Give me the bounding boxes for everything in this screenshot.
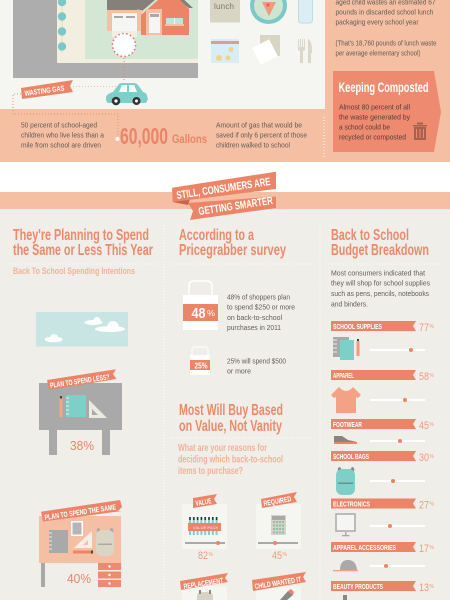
- slider: [258, 541, 298, 545]
- icon: shopping bag 48%: [183, 281, 218, 330]
- slider: [370, 348, 425, 352]
- panel: keeping composted: recycled or composted: [339, 132, 406, 142]
- text: gas saved: Amount of gas that would be: [216, 120, 302, 130]
- card: replacement: [180, 573, 228, 600]
- icon: shopping bag 25%: [190, 347, 210, 375]
- text: 48% of shoppers: to spend $250 or more: [227, 302, 295, 312]
- panel: keeping composted: the waste generated by: [339, 112, 410, 122]
- icon: shoe: [334, 436, 357, 444]
- text: budget intro: [331, 268, 430, 308]
- ribbon: wasting gas: WASTING GAS: [24, 84, 65, 98]
- section banner: still, consumers are getting smarter: GETTING SMARTER: [198, 195, 274, 218]
- budget row: footwear 45%: %: [430, 422, 434, 428]
- icon: trash can: [413, 122, 427, 140]
- text: children driven to school: mile from school are driven: [21, 140, 101, 150]
- panel: keeping composted: Almost 80 percent of all: [339, 102, 410, 112]
- heading: budget breakdown: Back to School: [331, 227, 409, 244]
- heading: pricegrabber survey: Pricegrabber survey: [179, 242, 286, 259]
- icon: calculator: [71, 521, 83, 536]
- section banner: still, consumers are getting smarter: [172, 172, 276, 220]
- ribbon: required: REQUIRED: [263, 494, 292, 508]
- budget row: apparel 58%: 58: [419, 371, 429, 383]
- budget row: electronics 27%: 27: [419, 500, 429, 512]
- icon: pizza plate: [250, 0, 287, 24]
- text: 25% will spend: 25% will spend $500: [227, 356, 286, 366]
- heading: pricegrabber survey: [179, 227, 286, 259]
- icon: row of trees: [58, 0, 66, 53]
- icon: backpack: [336, 467, 355, 495]
- statistic: 45%: %: [282, 552, 288, 558]
- text: 25% will spend: or more: [227, 366, 251, 376]
- icon: car: [106, 83, 148, 105]
- icon: house: [107, 0, 193, 35]
- budget row: apparel 58%: [331, 370, 434, 413]
- statistic: 40%: 40%: [67, 571, 91, 586]
- slider: [370, 479, 425, 483]
- statistic: 38%: 38%: [70, 438, 94, 453]
- slider: [370, 564, 425, 568]
- budget row: school supplies 77%: SCHOOL SUPPLIES: [333, 322, 382, 331]
- icon: set square: [74, 531, 92, 548]
- icon: napkins: [252, 35, 280, 65]
- budget row: electronics 27%: %: [430, 502, 434, 508]
- budget row: beauty products 13%: %: [430, 584, 434, 590]
- statistic: 82%: 82: [198, 550, 208, 562]
- icon: t-shirt: [331, 387, 361, 413]
- icon: shopping bag 25%: 25%: [194, 360, 208, 370]
- text: children driven to school: [21, 120, 104, 150]
- subheading: spending intentions: Back To School Spending Intentions: [13, 266, 135, 277]
- subheading: reasons question: items to purchase?: [178, 466, 243, 477]
- lunch waste items: [210, 0, 312, 65]
- icon: drawers: [98, 563, 121, 587]
- subheading: reasons question: deciding which back-to-school: [178, 454, 283, 466]
- text: budget intro: Most consumers indicated that: [331, 268, 425, 278]
- dotted route lines: [13, 58, 324, 157]
- icon: value pack: VALUE PACK: [193, 525, 219, 530]
- text: 48% of shoppers: 48% of shoppers plan: [227, 292, 290, 302]
- icon: lunch bag: lunch: [214, 2, 234, 11]
- budget row: beauty products 13%: [331, 581, 434, 600]
- subheading: reasons question: [178, 443, 283, 477]
- text: 48% of shoppers: purchases in 2011: [227, 323, 281, 332]
- billboard: plan to spend less: [39, 369, 122, 455]
- budget row: school supplies 77%: [331, 321, 434, 360]
- text: gas saved: children walked to school: [216, 140, 290, 150]
- slider: [185, 541, 225, 545]
- text: lunch packaging waste: [336, 0, 436, 58]
- text: lunch packaging waste: pounds in discarded school lunch: [336, 8, 434, 16]
- icon: bottle: [343, 595, 347, 600]
- panel: keeping composted: a school could be: [339, 122, 390, 132]
- text: 25% will spend: [227, 356, 286, 376]
- icon: shopping bag 48%: 48: [192, 305, 206, 322]
- text: children driven to school: 50 percent of school-aged: [21, 120, 97, 130]
- card: required 45%: [256, 492, 301, 562]
- icon: set square: [89, 400, 107, 418]
- budget row: school bags 30%: [331, 451, 434, 495]
- icon: fork and knife: [298, 39, 312, 63]
- ribbon: plan to spend the same: PLAN TO SPEND THE SAME: [44, 502, 117, 522]
- text: children driven to school: children who live less than a: [21, 130, 104, 140]
- heading: value not vanity: [179, 402, 283, 435]
- icon: pencil: [73, 550, 93, 554]
- heading: value not vanity: Most Will Buy Based: [179, 402, 283, 419]
- icon: calculator: [271, 515, 286, 535]
- icon: location marker circle: [112, 34, 136, 56]
- text: 48% of shoppers: [227, 292, 295, 332]
- icon: backpack: [197, 590, 213, 600]
- icon: shopping bag 48%: %: [207, 309, 215, 318]
- text: gas saved: [216, 120, 307, 150]
- heading: planning to spend: [13, 227, 153, 259]
- subheading: reasons question: What are your reasons for: [178, 443, 267, 454]
- column dividers: [9, 225, 445, 600]
- icon: snack bag: [211, 39, 239, 63]
- budget row: footwear 45%: 45: [419, 420, 429, 432]
- icon: pencil: [60, 396, 62, 417]
- text: budget intro: and binders.: [331, 300, 368, 308]
- slider: [370, 398, 425, 402]
- heading: planning to spend: the Same or Less This Year: [13, 242, 153, 259]
- icon: backpack: [96, 528, 114, 556]
- budget row: school bags 30%: SCHOOL BAGS: [333, 452, 369, 461]
- heading: value not vanity: on Value, Not Vanity: [179, 418, 282, 435]
- budget row: electronics 27%: [331, 498, 434, 536]
- budget row: apparel accessories 17%: APPAREL ACCESSORIES: [333, 543, 396, 552]
- ribbon: plan to spend less: PLAN TO SPEND LESS?: [49, 372, 110, 390]
- budget row: electronics 27%: ELECTRONICS: [333, 500, 370, 508]
- card: value 82%: [182, 494, 227, 562]
- budget row: beauty products 13%: BEAUTY PRODUCTS: [333, 582, 383, 591]
- ribbon: value: VALUE: [195, 496, 212, 508]
- budget row: school supplies 77%: %: [430, 324, 434, 330]
- icon: notebook: [49, 530, 68, 553]
- heading: planning to spend: They're Planning to Spend: [13, 227, 149, 244]
- budget row: school supplies 77%: 77: [419, 322, 429, 334]
- budget row: apparel accessories 17%: 17: [419, 543, 429, 555]
- statistic: 45%: 45: [272, 550, 282, 562]
- heading: pricegrabber survey: According to a: [179, 227, 254, 244]
- panel: keeping composted: [333, 71, 441, 152]
- text: budget intro: they will shop for school supplies: [331, 278, 430, 288]
- budget row: apparel 58%: APPAREL: [333, 371, 354, 380]
- text: gas saved: saved if only 6 percent of those: [216, 130, 307, 140]
- icon: marker: [280, 589, 294, 600]
- illustration: sky with clouds: [36, 312, 128, 346]
- neighbourhood map illustration: [13, 0, 198, 78]
- budget row: footwear 45%: [331, 419, 434, 444]
- text: budget intro: such as pens, pencils, notebooks: [331, 289, 429, 298]
- budget row: apparel accessories 17%: [331, 542, 434, 571]
- text: lunch packaging waste: per average elementary school): [336, 48, 420, 58]
- icon: notebook: [66, 395, 86, 417]
- ribbon: replacement: REPLACEMENT: [183, 576, 224, 591]
- statistic: 60,000 gallons: 60,000: [120, 123, 168, 149]
- icon: water bottle: [298, 0, 312, 23]
- icon: monitor: [336, 514, 355, 536]
- text: lunch packaging waste: packaging every school year: [336, 18, 419, 26]
- heading: budget breakdown: [331, 227, 429, 259]
- text: 48% of shoppers: on back-to-school: [227, 313, 282, 322]
- section banner: still, consumers are getting smarter: STILL, CONSUMERS ARE: [176, 176, 271, 202]
- card: child wanted it: [252, 572, 306, 600]
- budget row: apparel 58%: %: [430, 373, 434, 379]
- slider: [370, 524, 425, 528]
- icon: notebook and pencil: [333, 337, 360, 360]
- statistic: 82%: %: [208, 552, 214, 558]
- budget row: school bags 30%: 30: [419, 452, 429, 464]
- icon: cap: [333, 560, 358, 571]
- budget row: school bags 30%: %: [430, 454, 434, 460]
- ribbon: child wanted it: CHILD WANTED IT: [254, 575, 302, 591]
- slider: [370, 439, 425, 443]
- budget row: beauty products 13%: 13: [419, 582, 429, 594]
- budget row: footwear 45%: FOOTWEAR: [333, 420, 362, 429]
- statistic: 60,000 gallons: Gallons: [172, 132, 207, 146]
- billboard: plan to spend the same: [39, 500, 122, 587]
- budget row: apparel accessories 17%: %: [430, 545, 434, 551]
